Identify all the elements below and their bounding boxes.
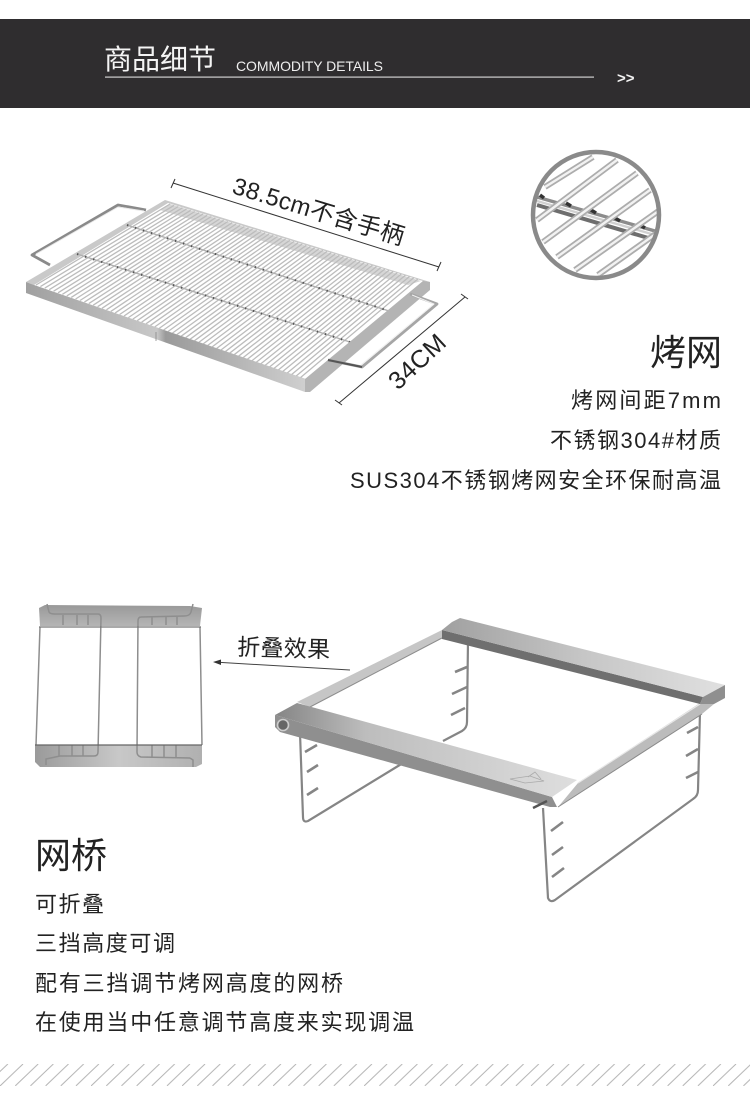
right handle bbox=[328, 294, 437, 367]
grill cross bars bbox=[77, 225, 392, 343]
bridge features text: 配有三挡调节烤网高度的网桥 bbox=[35, 971, 343, 996]
dimension: length: 38.5cm不含手柄 bbox=[229, 173, 407, 251]
grill back shaded band bbox=[160, 204, 421, 285]
grill close-up circle bbox=[533, 152, 660, 278]
left side rail bbox=[297, 630, 442, 707]
grill features text: SUS304不锈钢烤网安全环保耐高温 bbox=[350, 468, 721, 493]
header underline bbox=[105, 76, 594, 78]
dimension: width: 34CM bbox=[383, 329, 452, 395]
header subtitle: COMMODITY DETAILS bbox=[236, 58, 383, 74]
dimension: width bbox=[335, 294, 468, 405]
grill right rim bbox=[305, 281, 430, 392]
bridge features text: 三挡高度可调 bbox=[35, 931, 175, 956]
hinge bbox=[278, 720, 288, 730]
grill features text bbox=[350, 388, 721, 493]
grill features text: 不锈钢304#材质 bbox=[550, 428, 721, 453]
section heading: grill: 烤网 bbox=[650, 332, 722, 373]
dimension: length bbox=[171, 173, 441, 271]
rear plate bbox=[442, 630, 703, 704]
grill features text: 烤网间距7mm bbox=[571, 388, 721, 413]
grill front face bbox=[26, 282, 305, 392]
bridge stand photo bbox=[275, 618, 725, 901]
grill photo bbox=[26, 200, 437, 392]
front plate top bbox=[275, 703, 577, 797]
folded top plate bbox=[39, 605, 202, 626]
header chevrons: >> bbox=[617, 70, 635, 87]
right side rail bbox=[558, 703, 714, 807]
legs bbox=[300, 640, 700, 901]
front plate side face bbox=[275, 715, 557, 807]
logo bbox=[510, 772, 544, 783]
arrow to folded view bbox=[213, 660, 350, 670]
left handle bbox=[32, 205, 146, 265]
fold effect label: 折叠效果 bbox=[237, 634, 331, 662]
grill frame top surface bbox=[26, 200, 430, 390]
bridge features text: 在使用当中任意调节高度来实现调温 bbox=[35, 1010, 414, 1035]
folded bridge photo bbox=[35, 604, 202, 767]
folded wires bbox=[36, 604, 202, 767]
folded bottom plate bbox=[35, 745, 202, 767]
section heading: bridge: 网桥 bbox=[35, 835, 107, 876]
header banner bbox=[0, 19, 750, 108]
header title: 商品细节 bbox=[104, 44, 216, 75]
grill bars bbox=[36, 204, 418, 378]
pin bbox=[533, 801, 547, 808]
bridge features text bbox=[35, 892, 414, 1035]
bridge features text: 可折叠 bbox=[35, 892, 104, 917]
